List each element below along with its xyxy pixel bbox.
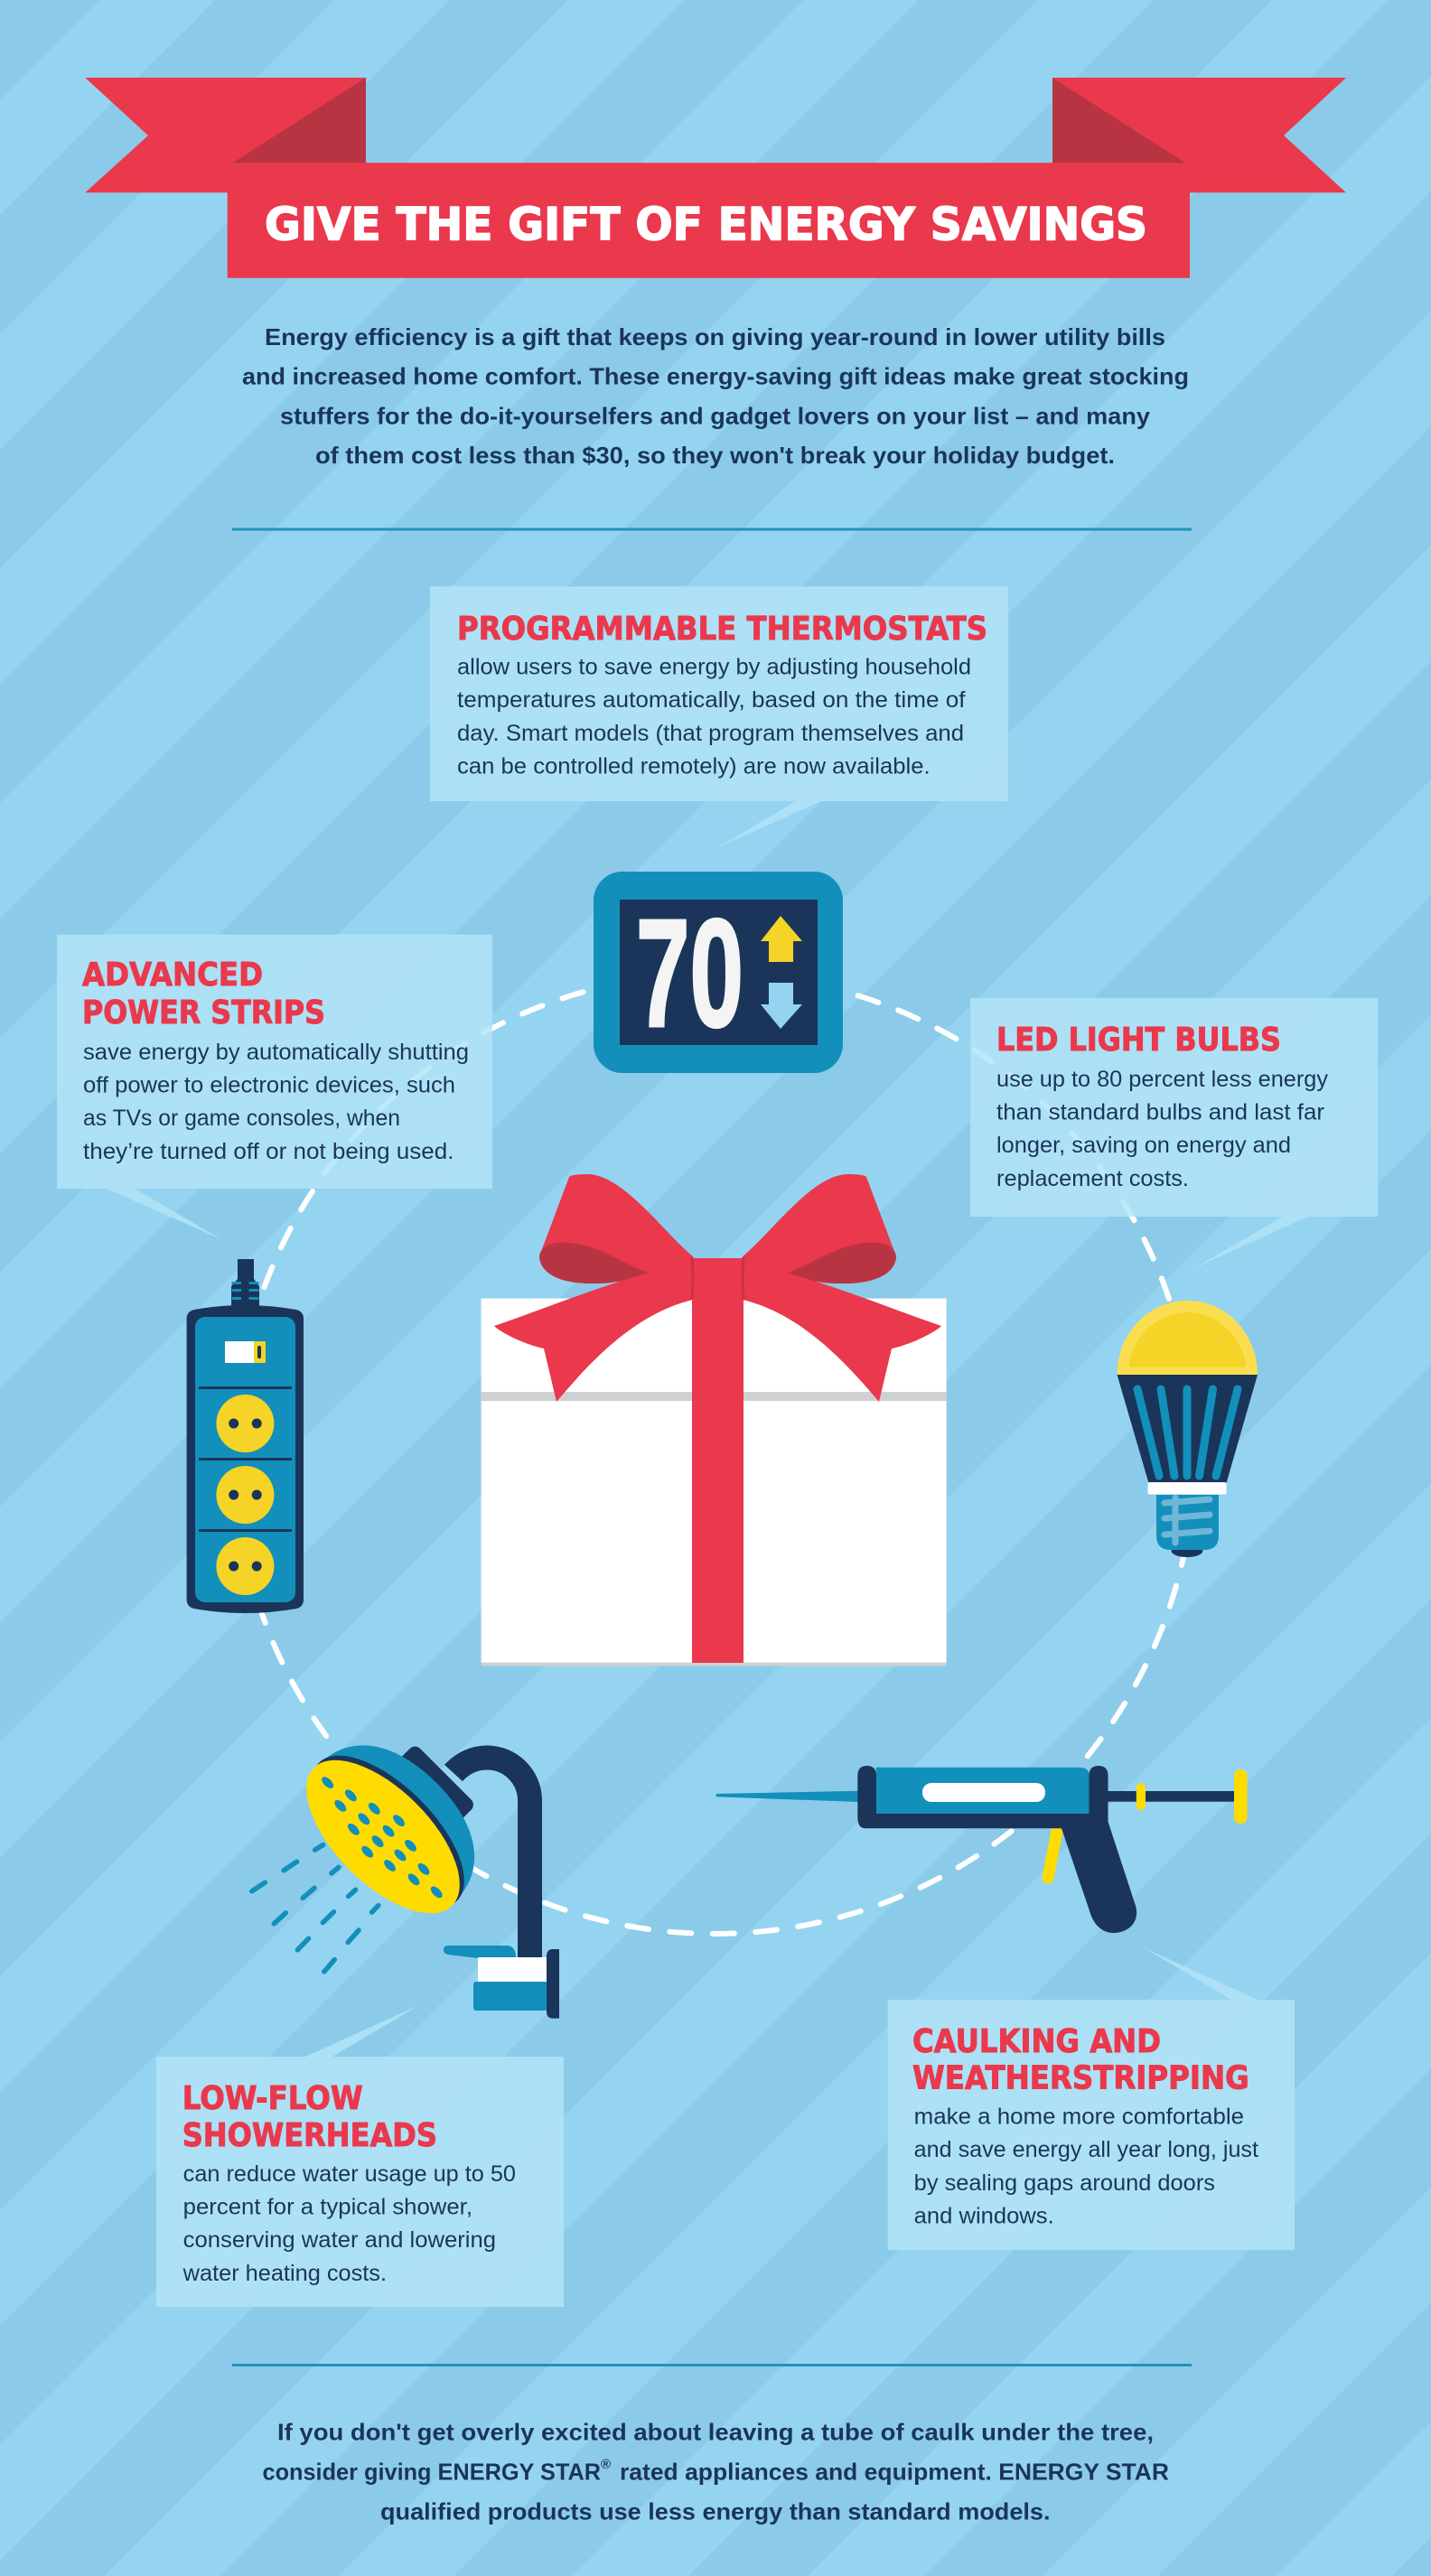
panel: advanced power strips [57, 935, 492, 1240]
heading: low-flow showerheads: SHOWERHEADS [182, 2117, 437, 2154]
heading: advanced power strips: POWER STRIPS [82, 994, 325, 1031]
icon: down arrow [761, 983, 802, 1029]
footer text block [262, 2419, 1169, 2525]
text: low-flow showerheads description: water heating costs. [182, 2261, 387, 2286]
panel: LED light bulbs [970, 998, 1378, 1268]
text: caulking and weatherstripping description: make a home more comfortable [914, 2105, 1244, 2130]
gift vertical ribbon [692, 1258, 744, 1663]
panel: caulking and weatherstripping [888, 1948, 1295, 2250]
intro text block: and increased home comfort. These energy-saving gift ideas make great stocking [242, 363, 1189, 390]
footer text block: rated appliances and equipment. ENERGY STAR [620, 2459, 1169, 2486]
heading: low-flow showerheads [182, 2080, 437, 2154]
footer text block: If you don't get overly excited about leaving a tube of caulk under the tree, [277, 2419, 1154, 2446]
text: low-flow showerheads description [182, 2161, 516, 2286]
thermostat reading: 70 [636, 888, 744, 1059]
text: programmable thermostats description: temperatures automatically, based on the time of [457, 687, 966, 713]
text: low-flow showerheads description: percent for a typical shower, [183, 2195, 472, 2220]
icon: up arrow [761, 916, 802, 962]
text: LED light bulbs description: use up to 80 percent less energy [996, 1067, 1329, 1092]
shower wall mount [444, 1946, 559, 2019]
text: programmable thermostats description: can be controlled remotely) are now available. [457, 754, 931, 779]
text: LED light bulbs description [996, 1067, 1329, 1191]
intro text block [242, 323, 1189, 469]
caulk gun rod and yellow grips [1048, 1769, 1247, 1878]
heading: caulking and weatherstripping: CAULKING AND [912, 2023, 1161, 2060]
shower pipe [454, 1758, 529, 1962]
panel: programmable thermostats [430, 586, 1008, 847]
text: programmable thermostats description: allow users to save energy by adjusting household [457, 655, 971, 680]
icon: thermostat [594, 872, 843, 1073]
footer text block: qualified products use less energy than standard models. [380, 2497, 1050, 2525]
text: advanced power strips description: they’re turned off or not being used. [83, 1139, 454, 1164]
heading: low-flow showerheads: LOW-FLOW [182, 2080, 363, 2117]
footer text block: ® [601, 2457, 611, 2472]
text: advanced power strips description: as TVs or game consoles, when [83, 1106, 400, 1131]
text: LED light bulbs description: than standard bulbs and last far [996, 1100, 1324, 1125]
footer text block: consider giving ENERGY STAR [262, 2459, 601, 2486]
power switch [225, 1341, 266, 1363]
title: GIVE THE GIFT OF ENERGY SAVINGS [265, 199, 1147, 251]
text: low-flow showerheads description: can reduce water usage up to 50 [183, 2161, 516, 2187]
icon: LED light bulb [1117, 1301, 1258, 1557]
text: programmable thermostats description: day. Smart models (that program themselves and [457, 721, 964, 746]
outlet sockets [216, 1395, 274, 1595]
heading: advanced power strips: ADVANCED [82, 957, 263, 994]
icon: wrapped gift box [482, 1174, 947, 1666]
text: programmable thermostats description [457, 655, 971, 779]
text: caulking and weatherstripping description: by sealing gaps around doors [914, 2170, 1215, 2196]
text: caulking and weatherstripping description: and windows. [914, 2204, 1054, 2229]
text: caulking and weatherstripping description: and save energy all year long, just [914, 2137, 1258, 2162]
text: LED light bulbs description: longer, saving on energy and [996, 1133, 1291, 1158]
text: low-flow showerheads description: conserving water and lowering [183, 2227, 496, 2253]
gift bow [494, 1174, 941, 1402]
power cord plug [231, 1259, 259, 1308]
icon: showerhead [252, 1705, 559, 2019]
icon: caulk gun [716, 1766, 1247, 1933]
shower nozzle holes [320, 1775, 444, 1900]
title ribbon banner [85, 78, 1346, 278]
panel: low-flow showerheads [156, 2005, 564, 2307]
heading: advanced power strips [82, 957, 325, 1031]
text: advanced power strips description: save energy by automatically shutting [83, 1040, 469, 1065]
heading: programmable thermostats: PROGRAMMABLE THERMOSTATS [457, 611, 987, 648]
dashed circle connecting the gift ideas [235, 974, 1194, 1934]
intro text block: of them cost less than $30, so they won't break your holiday budget. [315, 442, 1115, 469]
shower head [281, 1705, 515, 1939]
text: caulking and weatherstripping description [914, 2105, 1258, 2229]
heading: LED light bulbs: LED LIGHT BULBS [996, 1022, 1281, 1059]
water spray [252, 1844, 379, 1972]
intro text block: Energy efficiency is a gift that keeps on giving year-round in lower utility bills [265, 323, 1165, 350]
heading: caulking and weatherstripping: WEATHERSTRIPPING [912, 2060, 1249, 2097]
intro text block: stuffers for the do-it-yourselfers and gadget lovers on your list – and many [280, 403, 1151, 430]
heading: caulking and weatherstripping [912, 2023, 1249, 2097]
icon: power strip [187, 1259, 304, 1613]
text: LED light bulbs description: replacement costs. [996, 1166, 1189, 1191]
text: advanced power strips description [83, 1040, 469, 1164]
text: advanced power strips description: off power to electronic devices, such [83, 1073, 455, 1098]
